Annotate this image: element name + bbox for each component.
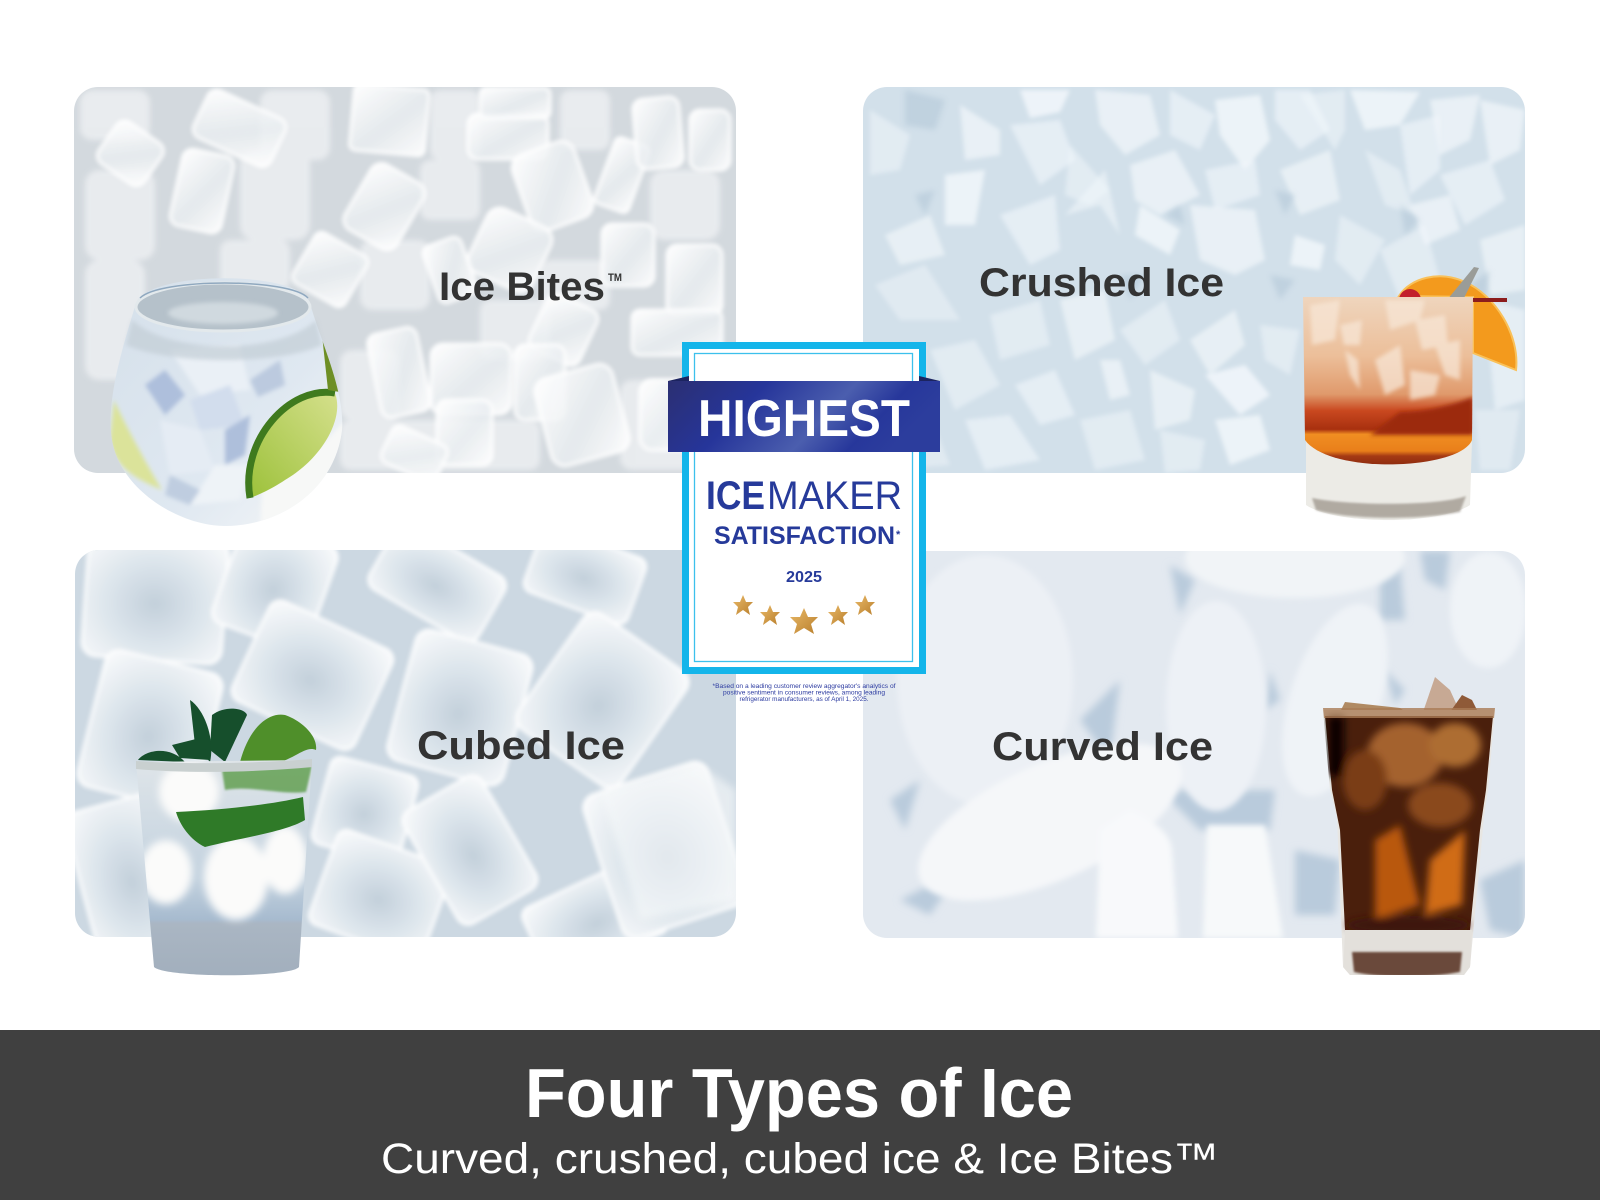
ribbon fold left (668, 376, 689, 381)
bright cube face (612, 772, 736, 916)
frosted base (262, 426, 342, 520)
lime peel in glass (176, 797, 305, 847)
right lime slice (249, 392, 337, 498)
base tint (1352, 952, 1462, 976)
rim top highlight (140, 283, 308, 298)
footnote: *Based on a leading customer review aggregator's analytics of (712, 684, 896, 690)
asterisk: * (896, 529, 901, 541)
footer banner (0, 1030, 1600, 1200)
rim ice (168, 302, 278, 324)
drink: orange cocktail glass (1303, 267, 1516, 520)
satisfaction: SATISFACTION (714, 522, 895, 550)
badge outer frame (686, 346, 922, 670)
cherry stem (1460, 298, 1507, 302)
subtitle: Curved, crushed, cubed ice & Ice Bites™ (381, 1135, 1219, 1183)
glass rim (1323, 708, 1495, 718)
left lime slice (110, 400, 162, 490)
crushed ice texture (863, 87, 1525, 473)
footnote: positive sentiment in consumer reviews, among leading (723, 690, 885, 696)
cubed ice texture (75, 550, 736, 937)
orange slice (1399, 276, 1516, 370)
label: crushed ice: Crushed Ice (979, 261, 1224, 305)
cocktail liquid (1303, 297, 1473, 464)
dark red band (1370, 397, 1473, 435)
spoon (1447, 267, 1479, 310)
lime peel upper (222, 766, 312, 793)
glass rim (136, 283, 310, 331)
drink: mojito glass (136, 700, 316, 975)
badge (668, 346, 940, 703)
glass body (111, 278, 342, 526)
glass outline (1323, 710, 1495, 975)
base shadow (1312, 496, 1466, 518)
label: cubed ice: Cubed Ice (417, 724, 625, 768)
cherry (1399, 289, 1421, 311)
year: 2025 (786, 569, 822, 586)
stars (733, 595, 875, 634)
label: ice bites: Ice Bites (439, 265, 605, 309)
ice above rim (1340, 677, 1478, 715)
panel: cubed ice (75, 550, 736, 937)
panel: curved ice (863, 518, 1526, 938)
icemaker: ice: ICE (706, 474, 765, 518)
banner background (0, 1030, 1600, 1200)
heading: highest: HIGHEST (698, 390, 910, 448)
drink: lime tonic glass (110, 278, 345, 530)
ribbon (668, 381, 940, 452)
lime peel top (240, 715, 316, 765)
icemaker: maker: MAKER (767, 474, 902, 518)
trademark mark: TM (608, 272, 622, 284)
glass base (1343, 930, 1472, 975)
panel: crushed ice (863, 87, 1525, 473)
cola liquid (1325, 716, 1493, 930)
footnote: refrigerator manufacturers, as of April 1, 2025. (740, 697, 869, 703)
glass body (136, 760, 312, 975)
badge inner line (694, 354, 912, 662)
lit ice in cola (1328, 716, 1481, 934)
crushed ice in cocktail (1310, 300, 1460, 400)
ribbon fold right (919, 376, 940, 381)
glass rim (136, 759, 312, 772)
glass upper band (126, 320, 322, 360)
footnote (712, 684, 896, 703)
ice bites texture (74, 84, 736, 485)
title: Four Types of Ice (525, 1054, 1073, 1132)
ice balls (140, 762, 307, 920)
panel: ice bites (74, 84, 736, 485)
mint leaves (138, 700, 247, 762)
drink: cola glass (1323, 677, 1495, 976)
glass ice (145, 345, 285, 505)
curved ice texture (863, 518, 1526, 938)
label: curved ice: Curved Ice (992, 725, 1213, 769)
glass base (1306, 440, 1472, 520)
